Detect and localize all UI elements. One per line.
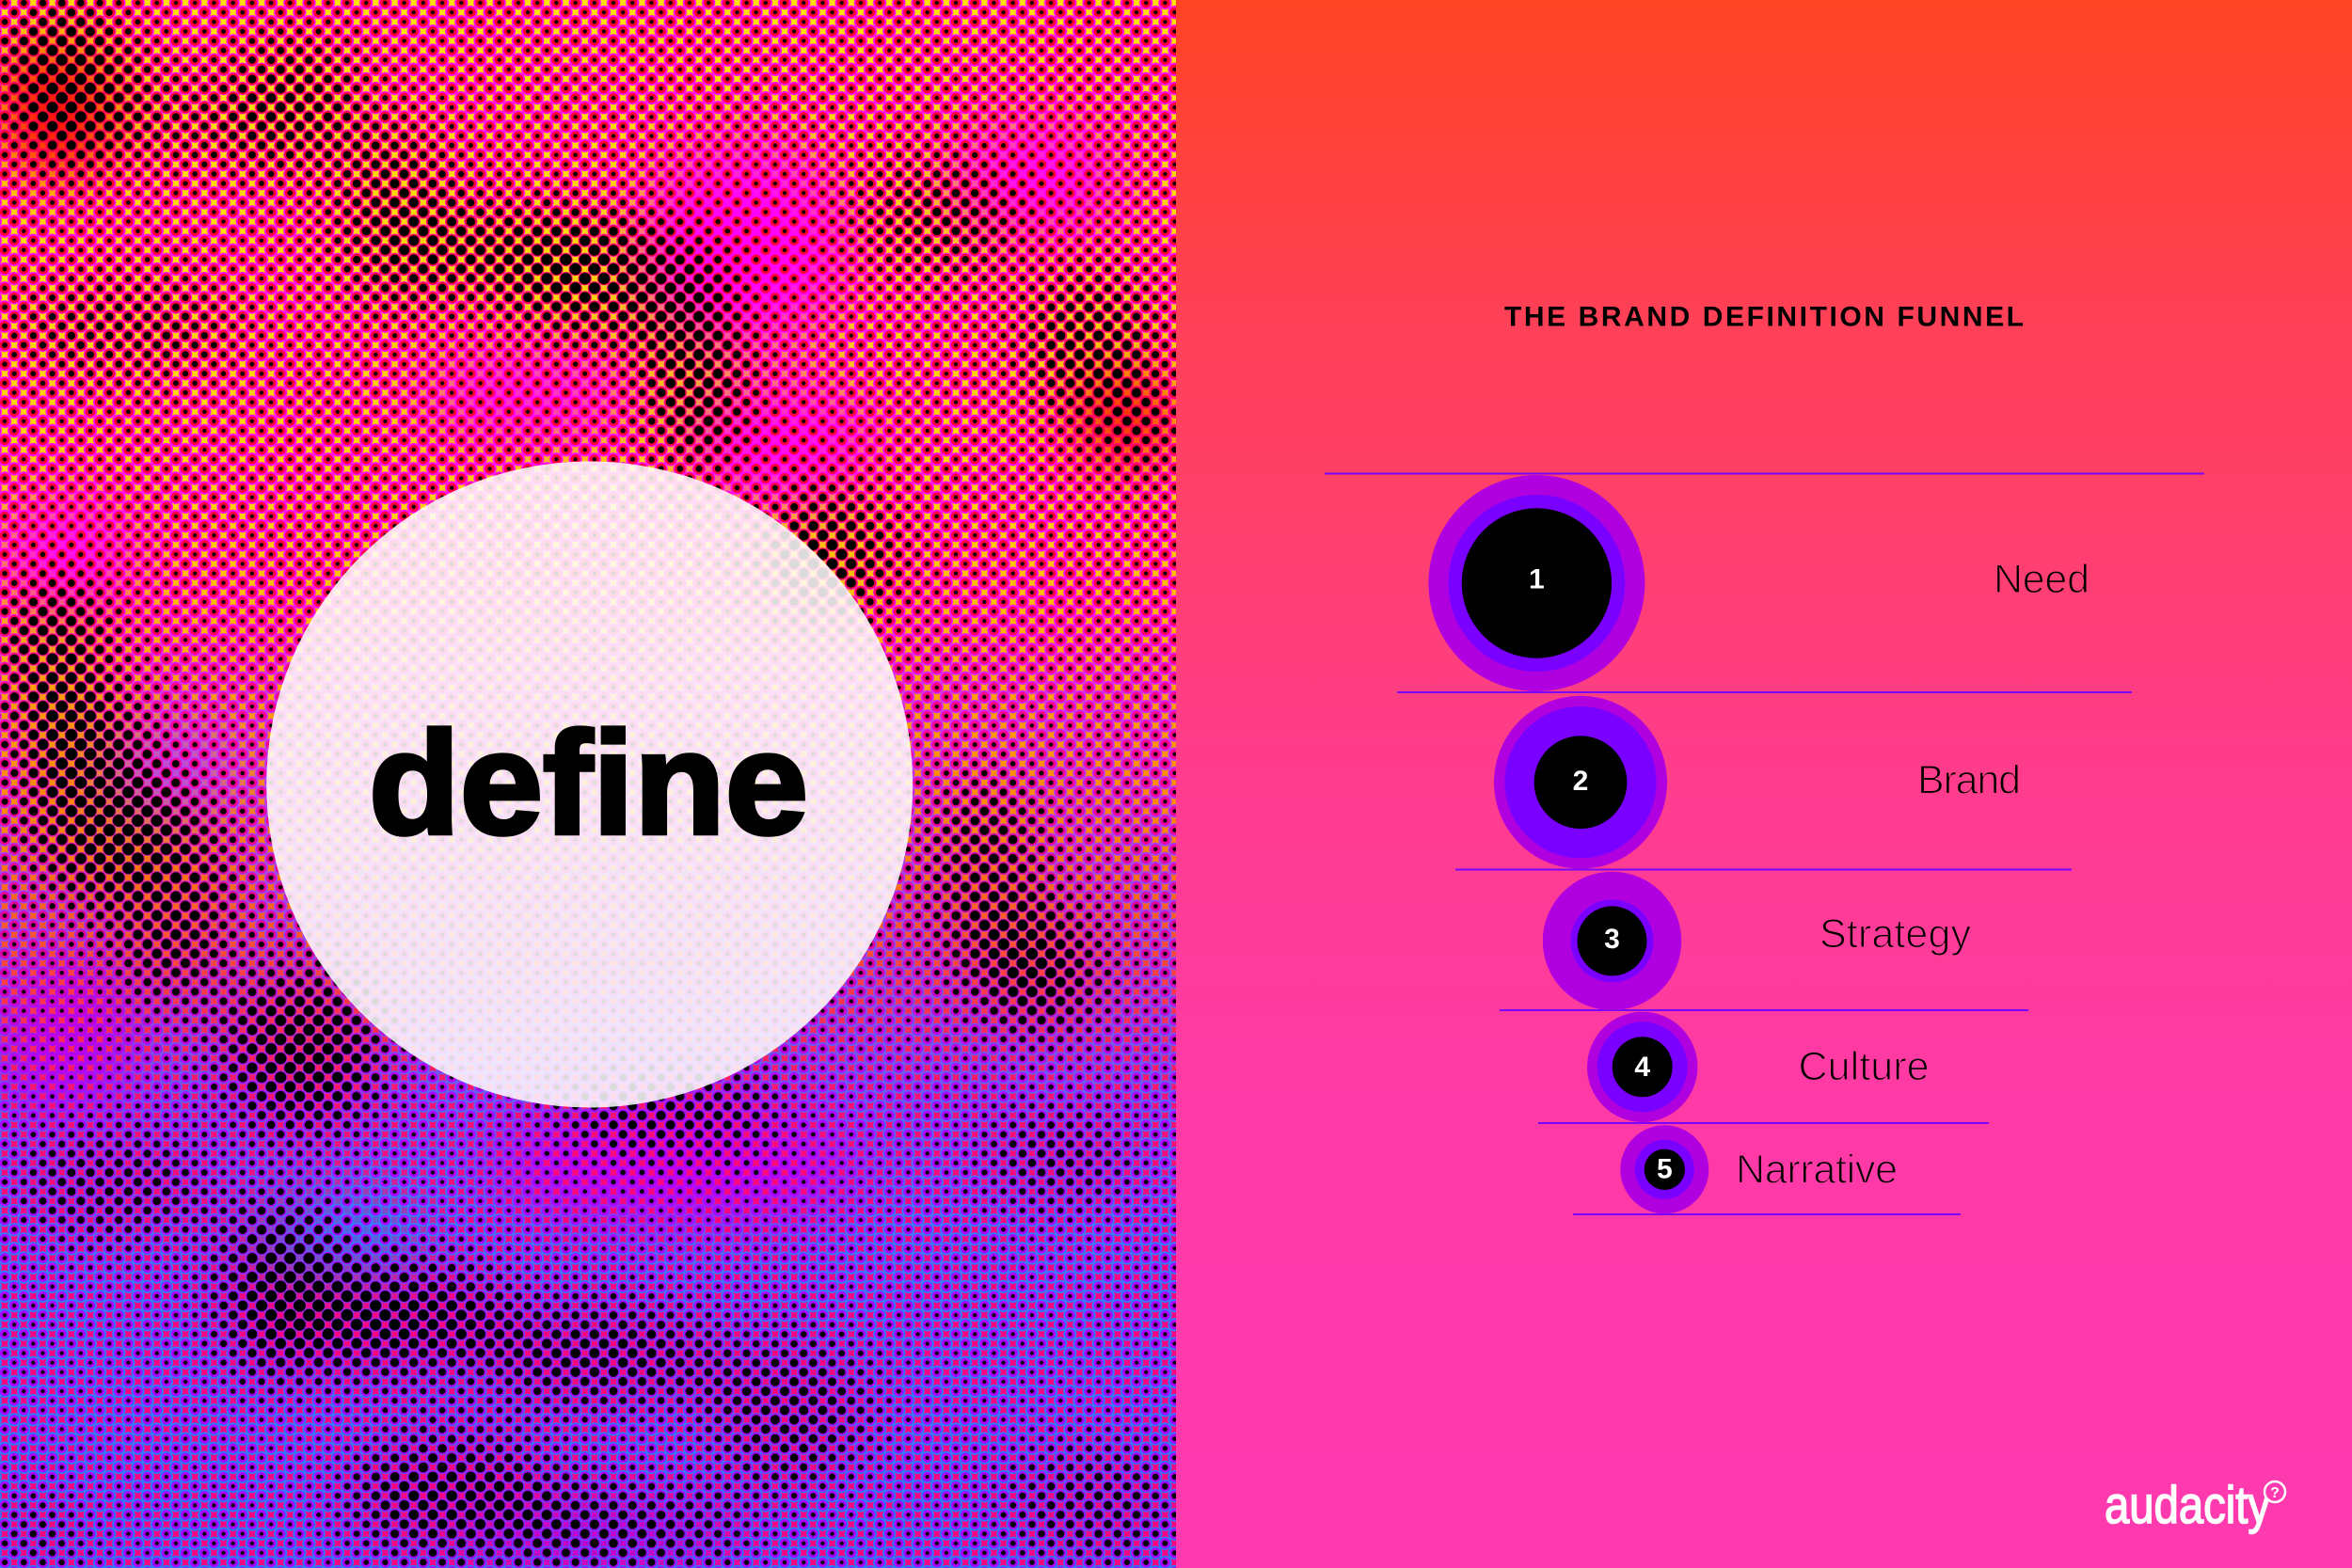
icon: numbered circle 3: 3 [1604, 924, 1620, 955]
icon: numbered circle 2: 2 [1573, 766, 1588, 797]
label: Need: Need [1994, 557, 2090, 602]
icon: numbered circle 1: 1 [1529, 564, 1545, 594]
label: Culture: Culture [1799, 1044, 1929, 1089]
translucent white circle [266, 461, 913, 1108]
panel background gradient [1176, 0, 2352, 1568]
funnel step 5: Narrative [1620, 1125, 1898, 1213]
funnel step 1: Need [1428, 475, 2090, 691]
icon: numbered circle 3 [1543, 872, 1681, 1010]
logo: audacity: audacity [2105, 1475, 2270, 1534]
halftone: outer ring dots [0, 0, 1176, 1568]
label: Brand: Brand [1917, 758, 2021, 803]
halftone: black core dots [0, 0, 1176, 1568]
halftone: gap colour field [0, 0, 1176, 1568]
panel: brand definition funnel [1176, 0, 2352, 1568]
icon: numbered circle 4 [1587, 1012, 1697, 1122]
title: THE BRAND DEFINITION FUNNEL [1504, 301, 2024, 333]
icon: numbered circle 2 [1494, 696, 1667, 869]
icon: numbered circle 1 [1428, 475, 1645, 691]
panel: halftone image with define circle [0, 0, 1176, 1568]
heading: define: define [369, 702, 808, 864]
logo: audacity: ? [2270, 1485, 2280, 1501]
label: Strategy: Strategy [1820, 911, 1972, 957]
funnel step 3: Strategy [1543, 872, 1972, 1010]
icon: numbered circle 4: 4 [1634, 1052, 1650, 1083]
halftone: inner ring dots [0, 0, 1176, 1568]
icon: numbered circle 5: 5 [1657, 1153, 1673, 1185]
funnel step 4: Culture [1587, 1012, 1929, 1122]
icon: numbered circle 5 [1620, 1125, 1708, 1213]
label: Narrative: Narrative [1736, 1148, 1898, 1193]
funnel step 2: Brand [1494, 696, 2021, 869]
